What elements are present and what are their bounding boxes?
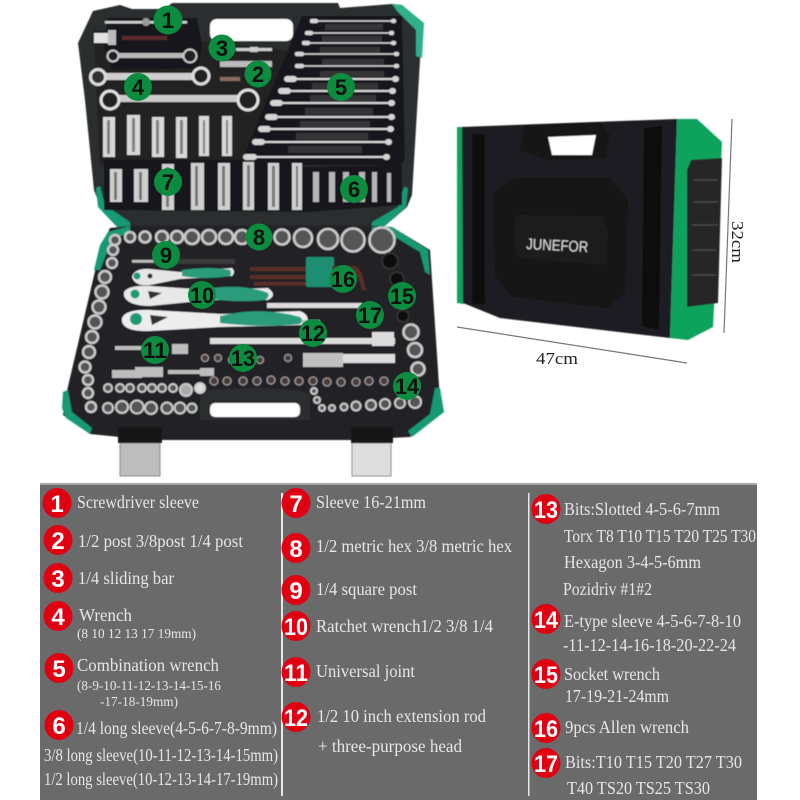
item 9: 9 [289, 578, 303, 605]
item 12: + three-purpose head [318, 736, 462, 756]
item 7: Sleeve 16-21mm [316, 492, 426, 512]
item 4: 4 [51, 604, 65, 631]
number markers on tool case: 2 [252, 62, 264, 87]
logo plate [514, 215, 608, 265]
item 14: 14 [534, 607, 559, 634]
medium ratchet wrench [90, 68, 209, 84]
number markers on tool case: 6 [348, 177, 360, 202]
item 7 [282, 488, 426, 518]
item 13: 13 [534, 497, 558, 524]
left column of sockets [80, 235, 120, 412]
item 6: 6 [52, 713, 66, 740]
item 13 [532, 494, 756, 599]
number markers on tool case: 11 [143, 338, 167, 363]
item 10: 10 [284, 614, 308, 641]
item 9 [282, 575, 417, 605]
right column of sockets [404, 324, 424, 376]
square post bar [132, 259, 235, 264]
item 2 [44, 525, 243, 555]
width dimension line [457, 327, 687, 363]
ratchet wrench small [132, 268, 234, 285]
item 11: Universal joint [316, 661, 415, 681]
item 12: 1/2 10 inch extension rod [317, 706, 486, 726]
item 15: Socket wrench [564, 664, 660, 684]
item 10: Ratchet wrench1/2 3/8 1/4 [316, 616, 493, 636]
universal joint tools [112, 344, 214, 378]
item 12: 12 [284, 705, 308, 732]
number markers on tool case: 5 [335, 75, 347, 100]
extension bars [210, 303, 395, 367]
large ratchet wrench [101, 90, 258, 110]
number markers on tool case: 17 [358, 303, 382, 328]
item 11 [282, 657, 415, 687]
item 17: T40 TS20 TS25 TS30 [567, 778, 710, 798]
item 1: 1 [50, 491, 64, 518]
item 3 [44, 563, 174, 593]
item 8: 1/2 metric hex 3/8 metric hex [316, 536, 512, 556]
allen wrenches [250, 257, 368, 290]
case handle [520, 122, 610, 160]
number markers on tool case: 1 [162, 8, 174, 33]
item 13: Bits:Slotted 4-5-6-7mm [564, 499, 720, 519]
item 1 [42, 488, 199, 518]
item 16: 9pcs Allen wrench [565, 717, 689, 737]
item 12 [282, 702, 486, 756]
height dimension line [724, 119, 732, 333]
item 3: 1/4 sliding bar [78, 568, 174, 588]
small ratchet wrench [108, 50, 196, 62]
long sockets row one [103, 115, 232, 158]
ratchet wrench large [122, 310, 308, 331]
number markers on tool case: 9 [160, 243, 172, 268]
item 5: (8-9-10-11-12-13-14-15-16 [77, 679, 221, 694]
item 17 [532, 748, 742, 798]
item 11: 11 [284, 660, 308, 687]
width label: 47cm [536, 349, 578, 368]
item 7: 7 [289, 491, 303, 518]
number markers on tool case: 8 [253, 225, 265, 250]
item 4: (8 10 12 13 17 19mm) [77, 627, 196, 642]
item 10 [282, 611, 493, 641]
item 6: 1/4 long sleeve(4-5-6-7-8-9mm) [76, 718, 277, 738]
combination wrenches [246, 21, 397, 157]
latches [118, 427, 393, 476]
item 13: Hexagon 3-4-5-6mm [564, 552, 701, 572]
item 6: 3/8 long sleeve(10-11-12-13-14-15mm) [44, 745, 278, 765]
item 17: Bits:T10 T15 T20 T27 T30 [565, 752, 742, 772]
item 14: -11-12-14-16-18-20-22-24 [563, 635, 736, 655]
item 13: Pozidriv #1#2 [563, 579, 652, 599]
textured strips [472, 134, 485, 304]
item 3: 3 [51, 566, 65, 593]
open tool case: bottom half [62, 226, 444, 476]
slots behind wrenches [288, 24, 384, 153]
item 15 [532, 659, 669, 706]
number markers on tool case: 15 [390, 284, 414, 309]
bit rows [202, 354, 388, 386]
open tool case: top half [78, 3, 424, 230]
item 4: Wrench [79, 605, 132, 625]
item 6: 1/2 long sleeve(10-12-13-14-17-19mm) [44, 769, 278, 789]
number markers on tool case: 16 [331, 267, 355, 292]
item 5: -17-18-19mm) [100, 695, 178, 710]
item 6 [44, 710, 278, 789]
item 4 [44, 601, 196, 642]
number markers on tool case: 7 [162, 170, 174, 195]
screwdriver sleeve tools [94, 18, 187, 45]
hexagon texture panel [493, 178, 628, 308]
posts [220, 47, 272, 81]
number markers on tool case: 14 [395, 374, 420, 399]
item 17: 17 [534, 751, 558, 778]
height label: 32cm [728, 221, 747, 263]
green side of case [670, 119, 722, 340]
item 14: E-type sleeve 4-5-6-7-8-10 [564, 611, 741, 631]
item 16 [532, 713, 689, 743]
case front [462, 119, 677, 338]
item 16: 16 [534, 716, 558, 743]
bottom right sockets [311, 388, 421, 411]
small long sockets [313, 172, 391, 202]
legend panel [40, 483, 757, 800]
item 13: Torx T8 T10 T15 T20 T25 T30 [564, 526, 756, 546]
number markers on tool case: 13 [231, 346, 255, 371]
item 5: Combination wrench [77, 655, 219, 675]
number markers on tool case: 12 [301, 321, 325, 346]
item 9: 1/4 square post [316, 579, 417, 599]
item 15: 17-19-21-24mm [565, 686, 669, 706]
item 2: 2 [51, 528, 65, 555]
item 1: Screwdriver sleeve [77, 492, 199, 512]
number markers on tool case: 4 [132, 75, 145, 100]
item 8: 8 [289, 536, 303, 563]
number markers on tool case [124, 6, 421, 400]
number markers on tool case: 10 [190, 283, 214, 308]
item 5 [44, 653, 221, 710]
ratchet wrench medium [124, 286, 273, 306]
bottom left sockets [103, 383, 205, 414]
item 8 [282, 533, 512, 563]
closed JUNEFOR case [457, 119, 722, 340]
item 15: 15 [534, 662, 558, 689]
row of sockets [125, 228, 394, 252]
item 2: 1/2 post 3/8post 1/4 post [78, 531, 243, 551]
long sockets row two [110, 162, 302, 210]
number markers on tool case: 3 [216, 36, 228, 61]
item 5: 5 [52, 656, 66, 683]
socket wrenches dark [382, 253, 409, 322]
side handle [687, 158, 722, 307]
brand name: JUNEFOR [526, 236, 589, 256]
item 14 [532, 604, 741, 655]
